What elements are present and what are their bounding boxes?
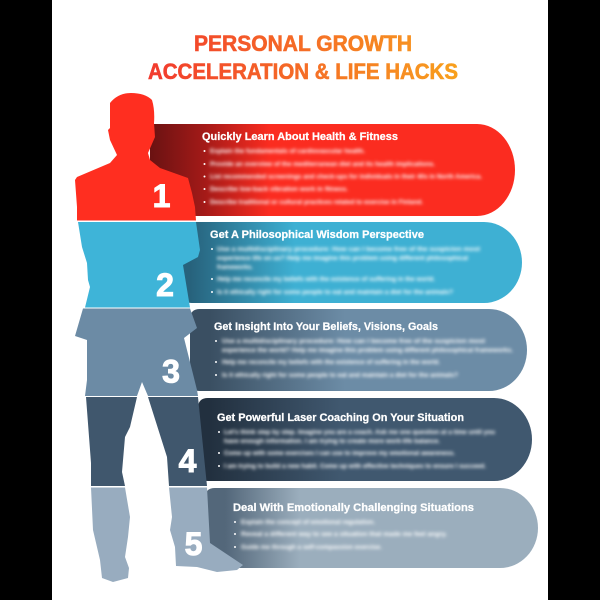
heading: philosophical wisdom: Get A Philosophical Wisdom Perspective <box>210 229 424 241</box>
title: PERSONAL GROWTH <box>194 31 412 56</box>
heading: laser coaching: Get Powerful Laser Coaching On Your Situation <box>217 412 464 424</box>
segment 2: torso <box>78 222 200 308</box>
bullet list: philosophical wisdom <box>217 246 481 296</box>
number 3: 3 <box>162 354 180 390</box>
bullet list: health and fitness <box>210 148 482 206</box>
bullets: emotional situations <box>234 521 236 548</box>
number 2: 2 <box>156 267 174 303</box>
bullet list: laser coaching: have enough information. I am trying to create more work-life balance. <box>224 438 440 445</box>
bullet list: philosophical wisdom: Help me reconcile my beliefs with the existence of suffering in the world. <box>217 276 435 283</box>
bullet list: philosophical wisdom: Is it ethically right for some people to eat and maintain a diet for the animals? <box>217 289 453 296</box>
bullet list: emotional situations <box>241 519 447 551</box>
bullet list: emotional situations: Reveal a different way to see a situation that made me feel angry. <box>241 531 447 538</box>
heading: emotional situations: Deal With Emotionally Challenging Situations <box>233 502 474 514</box>
title: ACCELERATION & LIFE HACKS <box>148 59 458 84</box>
silhouette: segmented man <box>75 93 243 582</box>
bullet list: beliefs, visions, goals: Help me reconcile my beliefs with the existence of suffering in the world. <box>222 359 440 366</box>
segment 1: head and shoulders <box>75 93 196 220</box>
segment 4: thighs <box>86 397 207 486</box>
bullet list: emotional situations: Guide me through a self-compassion exercise. <box>241 544 382 551</box>
bullet list: health and fitness: Explain the fundamentals of cardiovascular health. <box>210 148 365 155</box>
bullet list: philosophical wisdom: frameworks. <box>217 264 253 271</box>
title <box>148 31 458 84</box>
bullet list: laser coaching <box>224 429 495 470</box>
bullets: beliefs, visions, goals <box>215 340 217 376</box>
bullets: philosophical wisdom <box>211 248 213 293</box>
bullet list: health and fitness: Provide an overview of the mediterranean diet and its health implications. <box>210 161 435 168</box>
bullet list: health and fitness: List recommended screenings and check-ups for individuals in their 40s in North America. <box>210 174 482 180</box>
segment 3: hips <box>75 308 198 396</box>
bullets: laser coaching <box>218 431 220 467</box>
bullet list: beliefs, visions, goals: Use a multidisciplinary procedure: How can I become free of the suspicion most <box>222 338 486 345</box>
number 4: 4 <box>179 443 197 479</box>
bullet list: laser coaching: Come up with some exercises I can use to improve my emotional awareness. <box>224 450 455 457</box>
bullet list: philosophical wisdom: Use a multidisciplinary procedure: How can I become free of the suspicion most <box>217 246 481 253</box>
panel: laser coaching <box>198 398 532 481</box>
bullet list: beliefs, visions, goals: Is it ethically right for some people to eat and maintain a diet for the animals? <box>222 372 458 379</box>
heading: health and fitness: Quickly Learn About Health & Fitness <box>202 131 398 143</box>
bullet list: philosophical wisdom: experience life on us? Help me imagine this problem using different philosophical <box>217 255 468 262</box>
bullet list: emotional situations: Explain the concept of emotional regulation. <box>241 519 375 526</box>
panel: beliefs, visions, goals <box>190 309 527 391</box>
panel: philosophical wisdom <box>183 222 522 303</box>
bullet list: health and fitness: Describe low-back vibration work in fitness. <box>210 186 348 193</box>
bullet list: beliefs, visions, goals: experience the world? Help me imagine this problem using different philosophical frameworks. <box>222 347 513 354</box>
panel: emotional situations <box>205 488 538 568</box>
bullet list: health and fitness: Describe traditional or cultural practices related to exercise in Finland. <box>210 199 423 206</box>
segment 5: lower legs <box>91 488 243 582</box>
bullet list: laser coaching: Let's think step by step. Imagine you are a coach. Ask me one question at a time until you <box>224 429 495 436</box>
bullet list: laser coaching: I am trying to build a new habit. Come up with effective techniques to ensure I succeed. <box>224 463 486 470</box>
bullets: health and fitness <box>204 150 206 203</box>
heading: beliefs, visions, goals: Get Insight Into Your Beliefs, Visions, Goals <box>214 321 438 333</box>
number 1: 1 <box>153 178 170 214</box>
number 5: 5 <box>185 526 202 562</box>
panel: health and fitness <box>150 124 515 216</box>
bullet list: beliefs, visions, goals <box>222 338 513 379</box>
